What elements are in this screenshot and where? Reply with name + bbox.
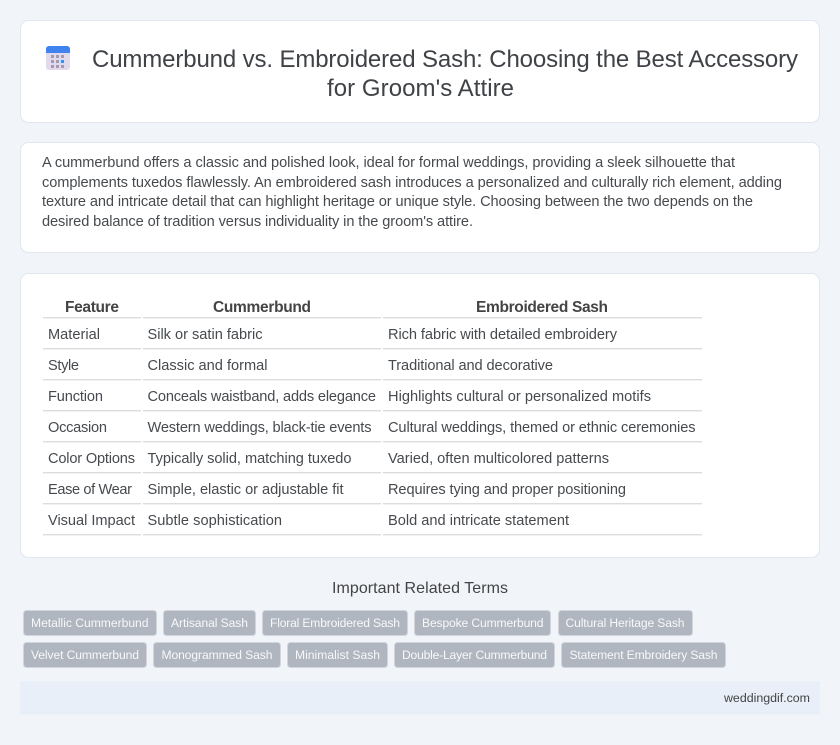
row: function: Function — [48, 389, 103, 405]
icon: calendar — [46, 46, 70, 70]
row: ease of wear: Simple, elastic or adjustable fit — [148, 482, 344, 498]
row: material: Material — [48, 327, 100, 343]
related term tags — [24, 610, 726, 668]
tag: Statement Embroidery Sash — [570, 648, 718, 662]
row: color options: Color Options — [48, 451, 135, 467]
text block: summary: desired balance of tradition versus individuality in the groom's attire. — [42, 214, 473, 230]
row: function: Conceals waistband, adds elegance — [148, 389, 376, 405]
row: style: Style — [48, 358, 79, 374]
tag: Monogrammed Sash — [162, 648, 272, 662]
panel: summary paragraph — [20, 142, 820, 252]
row: occasion: Cultural weddings, themed or ethnic ceremonies — [388, 420, 696, 436]
tag: Floral Embroidered Sash — [270, 616, 400, 630]
row: occasion: Occasion — [48, 420, 107, 436]
tag: Artisanal Sash — [171, 616, 248, 630]
row: visual impact — [43, 513, 702, 535]
row: ease of wear: Ease of Wear — [48, 482, 132, 498]
tag — [24, 610, 156, 636]
table header: Feature — [65, 299, 119, 316]
row: color options — [43, 451, 702, 473]
title: for Groom's Attire — [327, 75, 514, 102]
row: visual impact: Subtle sophistication — [148, 513, 282, 529]
row: occasion: Western weddings, black-tie events — [148, 420, 372, 436]
panel: title card — [20, 20, 820, 122]
text block: summary: A cummerbund offers a classic and polished look, ideal for formal weddings, providing a sleek silhouette that — [42, 155, 735, 171]
tag — [414, 610, 550, 636]
panel: comparison table — [20, 274, 820, 558]
tag — [288, 642, 388, 668]
text block: summary: texture and intricate detail that can highlight heritage or unique style. Choosing between the two depends on the — [42, 194, 753, 210]
row: function — [43, 389, 702, 411]
tag: Bespoke Cummerbund — [422, 616, 544, 630]
row: occasion — [43, 420, 702, 442]
tag — [558, 610, 692, 636]
footer band — [20, 681, 820, 714]
tag — [394, 642, 554, 668]
tag: Double-Layer Cummerbund — [402, 648, 547, 662]
footer source: weddingdif.com — [723, 691, 810, 705]
row: ease of wear: Requires tying and proper positioning — [388, 482, 626, 498]
tag: Velvet Cummerbund — [31, 648, 139, 662]
row: function: Highlights cultural or personalized motifs — [388, 389, 651, 405]
row: material: Silk or satin fabric — [148, 327, 262, 343]
tag — [154, 642, 280, 668]
heading: important related terms: Important Related Terms — [332, 580, 508, 597]
text block: summary: complements tuxedos flawlessly. An embroidered sash introduces a personalized and culturally rich element, adding — [42, 175, 782, 191]
row: color options: Typically solid, matching tuxedo — [148, 451, 352, 467]
tag: Metallic Cummerbund — [31, 616, 148, 630]
tag: Minimalist Sash — [295, 648, 380, 662]
tag: Cultural Heritage Sash — [566, 616, 684, 630]
text block: summary — [42, 155, 782, 230]
tag — [562, 642, 726, 668]
row: style — [43, 358, 702, 380]
table header: Cummerbund — [213, 299, 311, 316]
row: visual impact: Visual Impact — [48, 513, 135, 529]
row: color options: Varied, often multicolored patterns — [388, 451, 609, 467]
table header: Embroidered Sash — [476, 299, 608, 316]
row: style: Classic and formal — [148, 358, 268, 374]
row: material — [43, 327, 702, 349]
row: material: Rich fabric with detailed embroidery — [388, 327, 618, 343]
tag — [262, 610, 408, 636]
row: ease of wear — [43, 482, 702, 504]
row: visual impact: Bold and intricate statement — [388, 513, 569, 529]
tag — [164, 610, 256, 636]
title — [92, 46, 798, 102]
title: Cummerbund vs. Embroidered Sash: Choosing the Best Accessory — [92, 46, 798, 73]
row: style: Traditional and decorative — [388, 358, 553, 374]
table header — [43, 299, 702, 318]
tag — [24, 642, 146, 668]
